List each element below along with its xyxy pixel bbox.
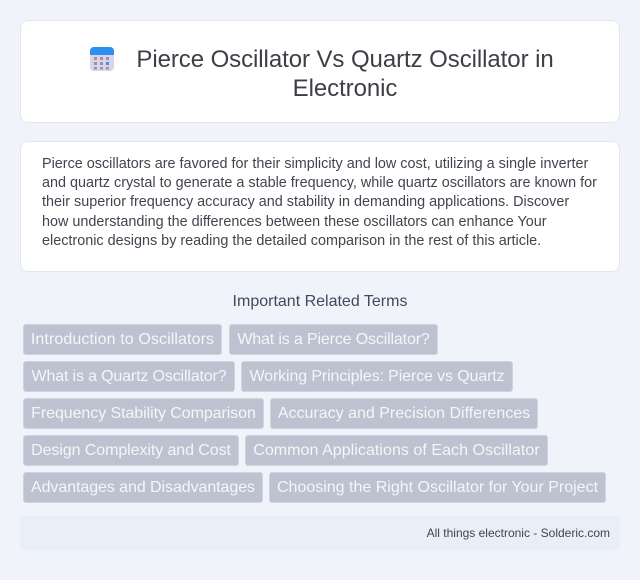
footer bar	[20, 516, 620, 550]
tag list: Design Complexity and Cost	[31, 442, 231, 459]
intro text: electronic designs by reading the detailed comparison in the rest of this article.	[42, 233, 541, 249]
icon: calendar	[90, 47, 114, 71]
tag list: Choosing the Right Oscillator for Your Project	[277, 479, 598, 496]
intro text: how understanding the differences between these oscillators can enhance Your	[42, 214, 547, 230]
intro text	[42, 156, 597, 249]
footer credit: All things electronic - Solderic.com	[427, 526, 610, 540]
intro text: their superior frequency accuracy and stability in demanding applications. Discover	[42, 194, 569, 210]
intro panel	[20, 141, 620, 272]
intro text: Pierce oscillators are favored for their simplicity and low cost, utilizing a single inverter	[42, 156, 588, 172]
title	[136, 46, 554, 102]
title: Pierce Oscillator Vs Quartz Oscillator in	[136, 46, 554, 73]
tag list: Working Principles: Pierce vs Quartz	[249, 368, 505, 385]
tag list: Common Applications of Each Oscillator	[253, 442, 540, 459]
intro text: and quartz crystal to generate a stable frequency, while quartz oscillators are known for	[42, 175, 597, 191]
tag list: Advantages and Disadvantages	[31, 479, 255, 496]
tag list: Accuracy and Precision Differences	[278, 405, 530, 422]
tag list	[23, 324, 606, 503]
related terms heading: Important Related Terms	[233, 293, 407, 310]
tag list: What is a Pierce Oscillator?	[237, 331, 430, 348]
title: Electronic	[293, 75, 397, 102]
header card	[20, 20, 620, 123]
tag list: Introduction to Oscillators	[31, 331, 214, 348]
tag list: What is a Quartz Oscillator?	[32, 368, 226, 385]
tag list: Frequency Stability Comparison	[31, 405, 256, 422]
